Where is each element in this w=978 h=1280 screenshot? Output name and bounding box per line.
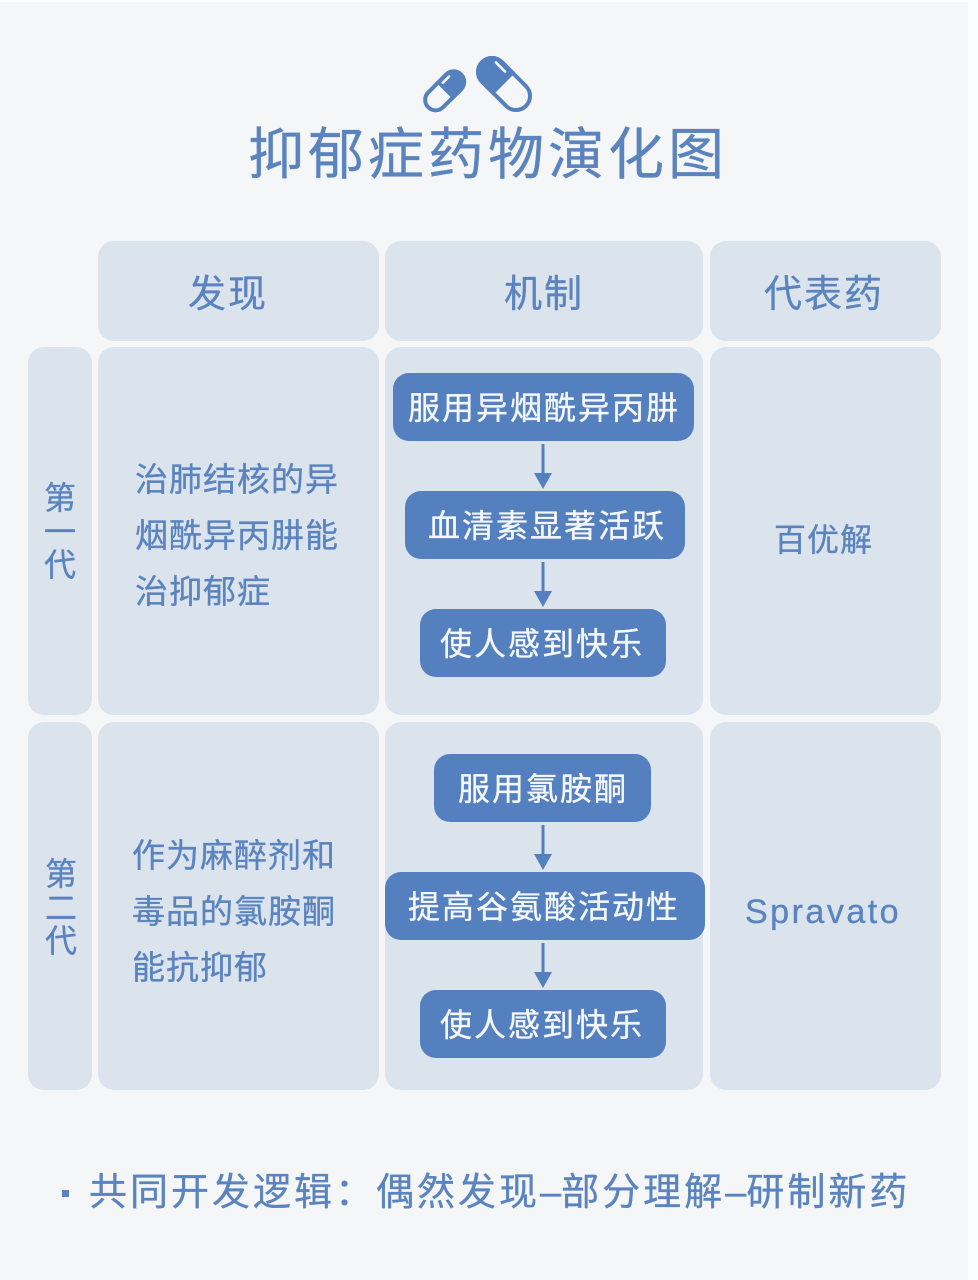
text: first generation discovery: 烟酰异丙肼能: [135, 517, 339, 554]
text: second generation: 代: [45, 923, 77, 959]
text: common development logic: 共同开发逻辑：偶然发现–部分理解–研制新药: [89, 1172, 910, 1214]
text: first generation discovery: 治抑郁症: [135, 573, 271, 610]
text: second generation discovery: 能抗抑郁: [132, 949, 268, 986]
footer note: [62, 1172, 910, 1214]
text: second generation: 二: [45, 890, 77, 926]
text: drug name: 百优解: [774, 522, 873, 558]
panel: first generation mechanism: [385, 347, 703, 715]
panel: second generation mechanism: [385, 722, 703, 1090]
panel: second generation discovery: [98, 722, 379, 1090]
panel: second generation drug: [710, 722, 941, 1090]
heading: representative drug: 代表药: [764, 274, 884, 316]
flow box: step 3: [420, 990, 666, 1058]
icon: large capsule: [469, 49, 537, 117]
flow box: step 1: 服用氯胺酮: [458, 771, 628, 807]
text: second generation discovery: 作为麻醉剂和: [132, 837, 336, 874]
text: first generation discovery: 治肺结核的异: [135, 461, 339, 498]
flow box: step 3: 使人感到快乐: [440, 1007, 644, 1043]
arrow: [534, 825, 552, 870]
arrow: [534, 562, 552, 607]
panel: header discovery: [98, 241, 379, 341]
text: second generation: 第: [45, 856, 77, 892]
flow box: step 1: [393, 373, 694, 441]
text: first generation: 代: [44, 547, 76, 583]
text: second generation discovery: [132, 837, 336, 986]
flow box: step 2: [385, 872, 705, 940]
flow box: step 2: 血清素显著活跃: [428, 508, 666, 544]
heading: mechanism: 机制: [504, 274, 584, 316]
text: second generation discovery: 毒品的氯胺酮: [132, 893, 336, 930]
panel: first generation drug: [710, 347, 941, 715]
icon: small capsule: [419, 64, 471, 116]
panel: first generation discovery: [98, 347, 379, 715]
flow box: step 1: [434, 754, 651, 822]
title: 抑郁症药物演化图: [248, 123, 728, 186]
flow box: step 2: 提高谷氨酸活动性: [408, 889, 680, 925]
icon: pills: [423, 56, 532, 112]
panel: header representative drug: [710, 241, 941, 341]
flow box: step 3: 使人感到快乐: [440, 626, 644, 662]
bullet: [62, 1190, 69, 1197]
text: first generation discovery: [135, 461, 339, 610]
arrow: [534, 444, 552, 489]
text: first generation: 一: [44, 514, 76, 550]
text: first generation: 第: [44, 480, 76, 516]
text: second generation: [45, 856, 77, 959]
text: first generation: [44, 480, 76, 583]
heading: discovery: 发现: [188, 274, 268, 316]
arrow: [534, 943, 552, 988]
text: drug name: Spravato: [745, 893, 901, 931]
panel: second generation label: [28, 722, 92, 1090]
flow box: step 3: [420, 609, 666, 677]
flow box: step 2: [405, 491, 685, 559]
panel: first generation label: [28, 347, 92, 715]
flow box: step 1: 服用异烟酰异丙肼: [408, 390, 680, 426]
panel: header mechanism: [385, 241, 703, 341]
